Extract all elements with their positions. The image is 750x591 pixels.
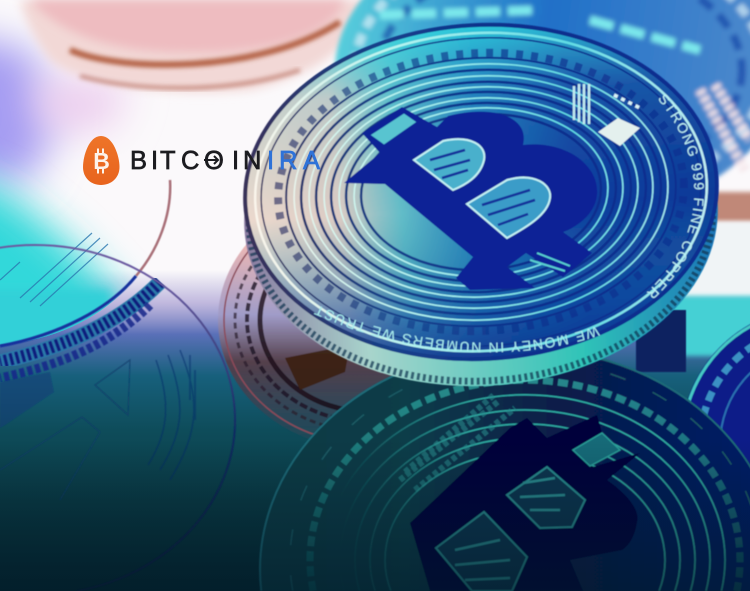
lower fade overlay [0,440,750,591]
coin details: white star and hatching [574,84,640,146]
coin face: WE MONEY IN NUMBERS WE TRUST [313,306,601,354]
left coin rim [136,180,170,276]
left coin knurled edge [0,282,160,362]
icon: bitcoin egg [83,136,120,185]
coin: main bitcoin coin [242,22,720,387]
background wash: right side behind coin [660,192,750,356]
coin edge [235,34,727,398]
coin face [242,22,720,362]
background: lower dark gradient [0,270,750,591]
coin: rear coin beneath main coin [218,190,522,450]
coin: top-left pink coin [20,0,370,92]
icon: arrow inside the letter O [204,156,218,164]
coin: left white and cyan coin [0,165,170,380]
symbol: main bitcoin mark [344,107,597,290]
logo [83,136,320,185]
coin inscription: right edge [635,97,700,294]
background: navy shadow under main coin [636,310,686,372]
wordmark: BITCOIN: BITCOIN [130,147,261,175]
wordmark: IRA: IRA [267,147,320,175]
coin: bottom large dark coin [260,348,750,591]
coin face: STRONG 999 FINE COPPER [646,94,705,299]
icon: bitcoin egg: B [93,148,110,174]
coin: lower-right blue coin [680,309,750,581]
coin: top-right background coin [335,0,750,220]
coin inscription: bottom edge [300,281,598,353]
coin: lower-left coin outline [0,245,235,591]
symbol: bottom coin bitcoin mark [410,415,640,591]
